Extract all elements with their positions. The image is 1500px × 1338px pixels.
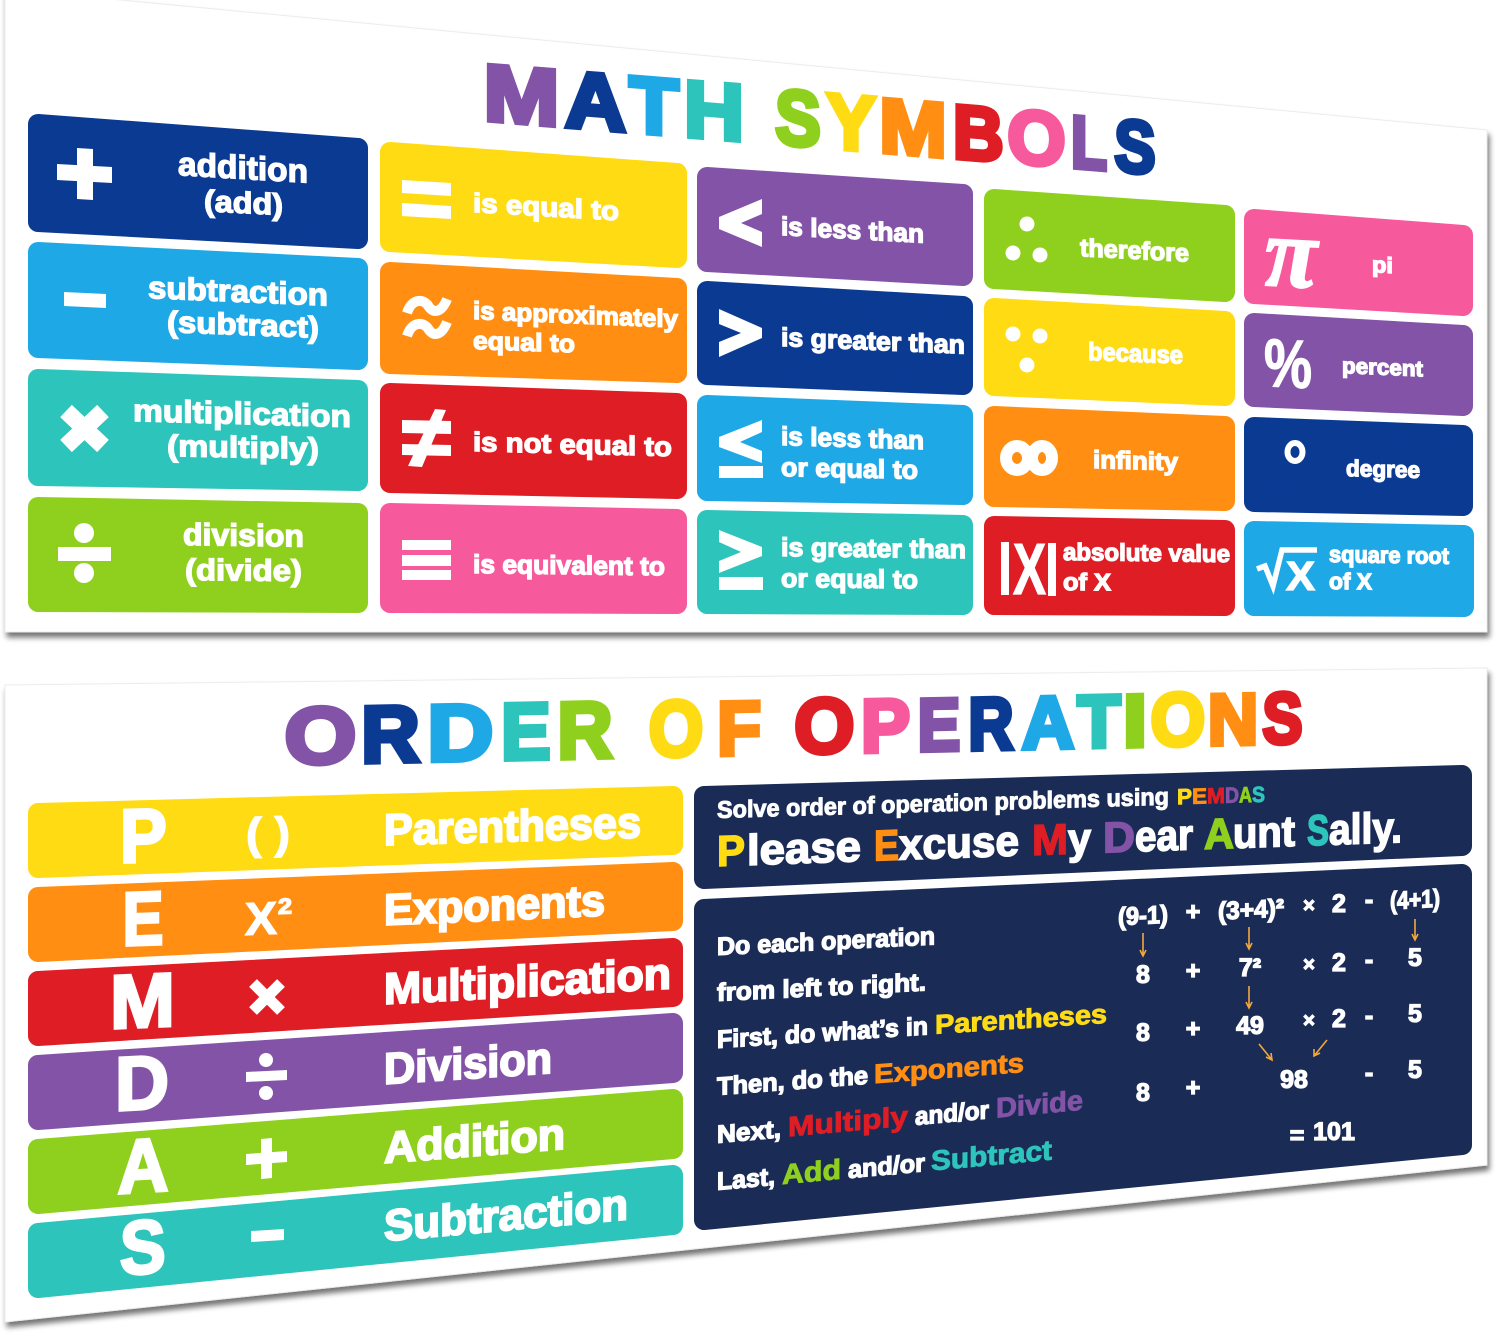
card: is less than: is less than	[781, 211, 924, 249]
card: degree	[1254, 427, 1463, 506]
equation steps: 2	[1332, 1005, 1346, 1033]
title: order of operations: D	[427, 688, 493, 778]
card: is greater than or equal to	[707, 520, 966, 605]
card: is less than or equal to	[707, 405, 963, 495]
text: please excuse my dear aunt sally: P	[717, 827, 745, 876]
row: D division	[38, 1023, 673, 1127]
row: E exponents: E	[122, 876, 164, 962]
text: solve order of operation problems: M	[1207, 783, 1225, 808]
card: is greater than	[707, 291, 965, 385]
row: S subtraction	[38, 1175, 673, 1292]
text: solve order of operation problems: E	[1192, 783, 1207, 809]
title: order of operations: F	[717, 686, 761, 772]
equation steps: ×	[1303, 1010, 1315, 1032]
text: instructions	[717, 922, 1107, 1196]
card: is equivalent to: is equivalent to	[473, 549, 665, 581]
card: is approximately equal to: equal to	[473, 327, 575, 358]
card: multiplication	[38, 379, 358, 481]
text: instructions: Then, do the	[717, 1062, 868, 1101]
text: instructions: and/or	[848, 1149, 925, 1184]
card: division: (divide)	[185, 554, 302, 588]
row: S subtraction: S	[120, 1204, 166, 1292]
card: is less than or equal to: is less than	[781, 421, 924, 455]
card: degree: degree	[1346, 455, 1420, 483]
row: A addition: Addition	[384, 1110, 565, 1173]
title: math symbols: M	[484, 47, 559, 143]
text: solve order of operation problems: P	[1177, 784, 1192, 809]
panel: PEMDAS mnemonic	[704, 775, 1462, 879]
card: is equivalent to	[390, 513, 677, 604]
card: pi: pi	[1372, 252, 1393, 278]
text: please excuse my dear aunt sally: ally.	[1329, 804, 1402, 855]
text: please excuse my dear aunt sally: lease	[747, 823, 861, 875]
title: math symbols: L	[1071, 100, 1107, 186]
row: S subtraction: Subtraction	[384, 1180, 628, 1251]
card: absolute value of x: X	[1013, 530, 1046, 610]
title: math symbols: T	[629, 59, 679, 153]
text: instructions: Last,	[717, 1163, 775, 1196]
row: P parentheses: P	[120, 793, 167, 879]
title: math symbols: S	[1114, 104, 1155, 190]
arrows: equation steps	[1140, 919, 1418, 1060]
equation steps: 2	[1332, 949, 1346, 977]
card: percent: %	[1264, 325, 1312, 403]
title: order of operations: A	[1022, 681, 1074, 765]
text: instructions: Do each operation	[717, 922, 935, 961]
equation steps: +	[1186, 1074, 1200, 1102]
row: M multiplication	[38, 948, 673, 1045]
text: instructions: Add	[782, 1154, 841, 1190]
equation steps: ×	[1303, 954, 1315, 976]
text: please excuse my dear aunt sally: S	[1307, 807, 1329, 855]
card: therefore: therefore	[1080, 234, 1189, 268]
equation steps: +	[1186, 957, 1200, 985]
title: order of operations: O	[649, 683, 703, 773]
title: math symbols: O	[1008, 94, 1066, 184]
text: instructions: Next,	[717, 1115, 781, 1149]
text: please excuse my dear aunt sally: D	[1103, 813, 1135, 863]
card: percent	[1254, 323, 1463, 406]
text: solve order of operation problems: Solve order of operation problems using	[717, 784, 1169, 824]
card: addition: addition	[178, 145, 308, 190]
equation steps: -	[1365, 1059, 1373, 1087]
card: absolute value of x	[994, 526, 1230, 610]
panel: order of operations poster	[5, 668, 1487, 1322]
card: is less than or equal to: or equal to	[781, 452, 918, 485]
equation steps: 98	[1280, 1066, 1308, 1094]
row: M multiplication: Multiplication	[384, 949, 671, 1014]
text: instructions: First, do what’s in	[717, 1012, 928, 1054]
text: please excuse my dear aunt sally: E	[874, 822, 899, 871]
title: order of operations: R	[558, 685, 613, 775]
row: D division: Division	[384, 1034, 552, 1094]
card: pi	[1254, 196, 1463, 310]
card: is less than	[707, 177, 963, 276]
panel: worked example	[704, 874, 1462, 1220]
text: instructions: Multiply	[788, 1101, 908, 1143]
text: please excuse my dear aunt sally: unt	[1233, 808, 1295, 858]
card: is approximately equal to	[390, 272, 678, 373]
title: order of operations: R	[361, 689, 420, 779]
title: math symbols: B	[953, 90, 1004, 179]
equation steps: -	[1365, 1002, 1373, 1030]
card: is greater than or equal to: or equal to	[781, 563, 918, 594]
row: P parentheses: Parentheses	[384, 798, 641, 855]
card: absolute value of x: of X	[1063, 569, 1111, 596]
equation steps: 101	[1313, 1118, 1355, 1146]
equation steps: (3+4)²	[1218, 894, 1284, 926]
text: instructions: and/or	[915, 1096, 989, 1131]
row: M multiplication: M	[110, 958, 175, 1045]
card: multiplication: (multiply)	[167, 430, 319, 466]
row: A addition	[38, 1099, 673, 1210]
card: is approximately equal to: is approximately	[473, 297, 678, 334]
card: therefore	[994, 199, 1225, 292]
title: order of operations: N	[1208, 680, 1258, 761]
card: is equal to	[390, 152, 677, 258]
card: division	[38, 507, 358, 603]
equation steps: 8	[1136, 1019, 1150, 1047]
row: D division: D	[115, 1040, 169, 1127]
row: E exponents: X	[245, 892, 277, 945]
equation steps: ×	[1303, 895, 1315, 917]
card: infinity	[994, 416, 1225, 501]
equation steps: (9-1)	[1118, 901, 1168, 931]
card: pi: π	[1265, 196, 1319, 310]
card: because	[994, 308, 1225, 396]
title: order of operations: O	[1151, 677, 1205, 762]
card: subtraction: (subtract)	[167, 306, 319, 345]
card: because: because	[1088, 338, 1183, 370]
equation steps: 8	[1136, 961, 1150, 989]
equation steps: 5	[1408, 1056, 1422, 1084]
text: instructions: Exponents	[874, 1048, 1024, 1089]
row: E exponents	[38, 872, 673, 962]
title: math symbols: H	[684, 63, 744, 158]
text: please excuse my dear aunt sally: A	[1204, 810, 1234, 859]
title: math symbols: A	[565, 54, 626, 148]
card: square root of x: X	[1286, 553, 1315, 599]
row: P parentheses	[38, 793, 673, 879]
title: math symbols: M	[879, 83, 947, 174]
equation steps: 5	[1408, 944, 1422, 972]
equation steps: 8	[1136, 1079, 1150, 1107]
title: order of operations: I	[1123, 679, 1147, 762]
card: is greater than or equal to: is greater than	[781, 532, 966, 564]
text: solve order of operation problems: S	[1252, 782, 1265, 807]
title: math symbols: S	[775, 72, 821, 164]
title: order of operations: O	[285, 691, 356, 781]
text: solve order of operation problems: D	[1225, 783, 1239, 808]
row: E exponents: 2	[278, 893, 292, 919]
text: please excuse my dear aunt sally: ear	[1135, 811, 1193, 861]
card: is greater than: is greater than	[781, 322, 965, 360]
title: order of operations: E	[501, 686, 550, 777]
title: math symbols: Y	[826, 77, 875, 168]
panel: math symbols poster	[5, 0, 1487, 632]
card: subtraction	[38, 252, 358, 360]
card: percent: percent	[1342, 353, 1424, 381]
equation steps: -	[1365, 946, 1373, 974]
card: square root of x: of X	[1329, 568, 1373, 594]
row: E exponents: Exponents	[384, 876, 605, 935]
text: solve order of operation problems: A	[1239, 782, 1252, 808]
card: addition: (add)	[204, 185, 283, 222]
card: is not equal to: is not equal to	[473, 427, 672, 462]
card: square root of x	[1254, 531, 1464, 607]
card: multiplication: multiplication	[133, 393, 351, 434]
text: instructions: Parentheses	[935, 999, 1107, 1040]
title: order of operations: P	[861, 683, 910, 768]
title: order of operations: R	[968, 682, 1013, 766]
card: infinity: infinity	[1093, 446, 1178, 476]
card: addition	[38, 124, 358, 239]
card: is equal to: is equal to	[473, 188, 619, 226]
card: absolute value of x: absolute value	[1063, 539, 1230, 568]
text: please excuse my dear aunt sally: xcuse	[899, 817, 1019, 870]
card: division: division	[183, 517, 304, 554]
equation steps: 7²	[1239, 954, 1261, 982]
card: subtraction: subtraction	[148, 270, 328, 313]
row: P parentheses: ( )	[246, 809, 290, 859]
title: order of operations: O	[794, 681, 854, 770]
equation steps: +	[1186, 898, 1200, 926]
equation steps: 49	[1236, 1012, 1264, 1040]
card: square root of x: square root	[1329, 541, 1449, 569]
title: order of operations: T	[1078, 680, 1121, 763]
title: order of operations: S	[1263, 679, 1302, 760]
equation steps: 2	[1332, 890, 1346, 918]
text: instructions: Divide	[996, 1085, 1083, 1124]
text: please excuse my dear aunt sally: M	[1032, 816, 1068, 865]
card: is not equal to	[390, 393, 677, 489]
text: instructions: from left to right.	[717, 968, 926, 1007]
text: instructions: Subtract	[931, 1135, 1052, 1177]
title: order of operations: E	[918, 683, 960, 767]
equation steps	[1118, 885, 1440, 1150]
equation steps: +	[1186, 1015, 1200, 1043]
text: please excuse my dear aunt sally: y	[1068, 815, 1091, 864]
equation steps: -	[1365, 886, 1373, 914]
equation steps: =	[1290, 1122, 1304, 1150]
equation steps: (4+1)	[1390, 885, 1440, 915]
row: A addition: A	[118, 1122, 169, 1210]
equation steps: 5	[1408, 1000, 1422, 1028]
